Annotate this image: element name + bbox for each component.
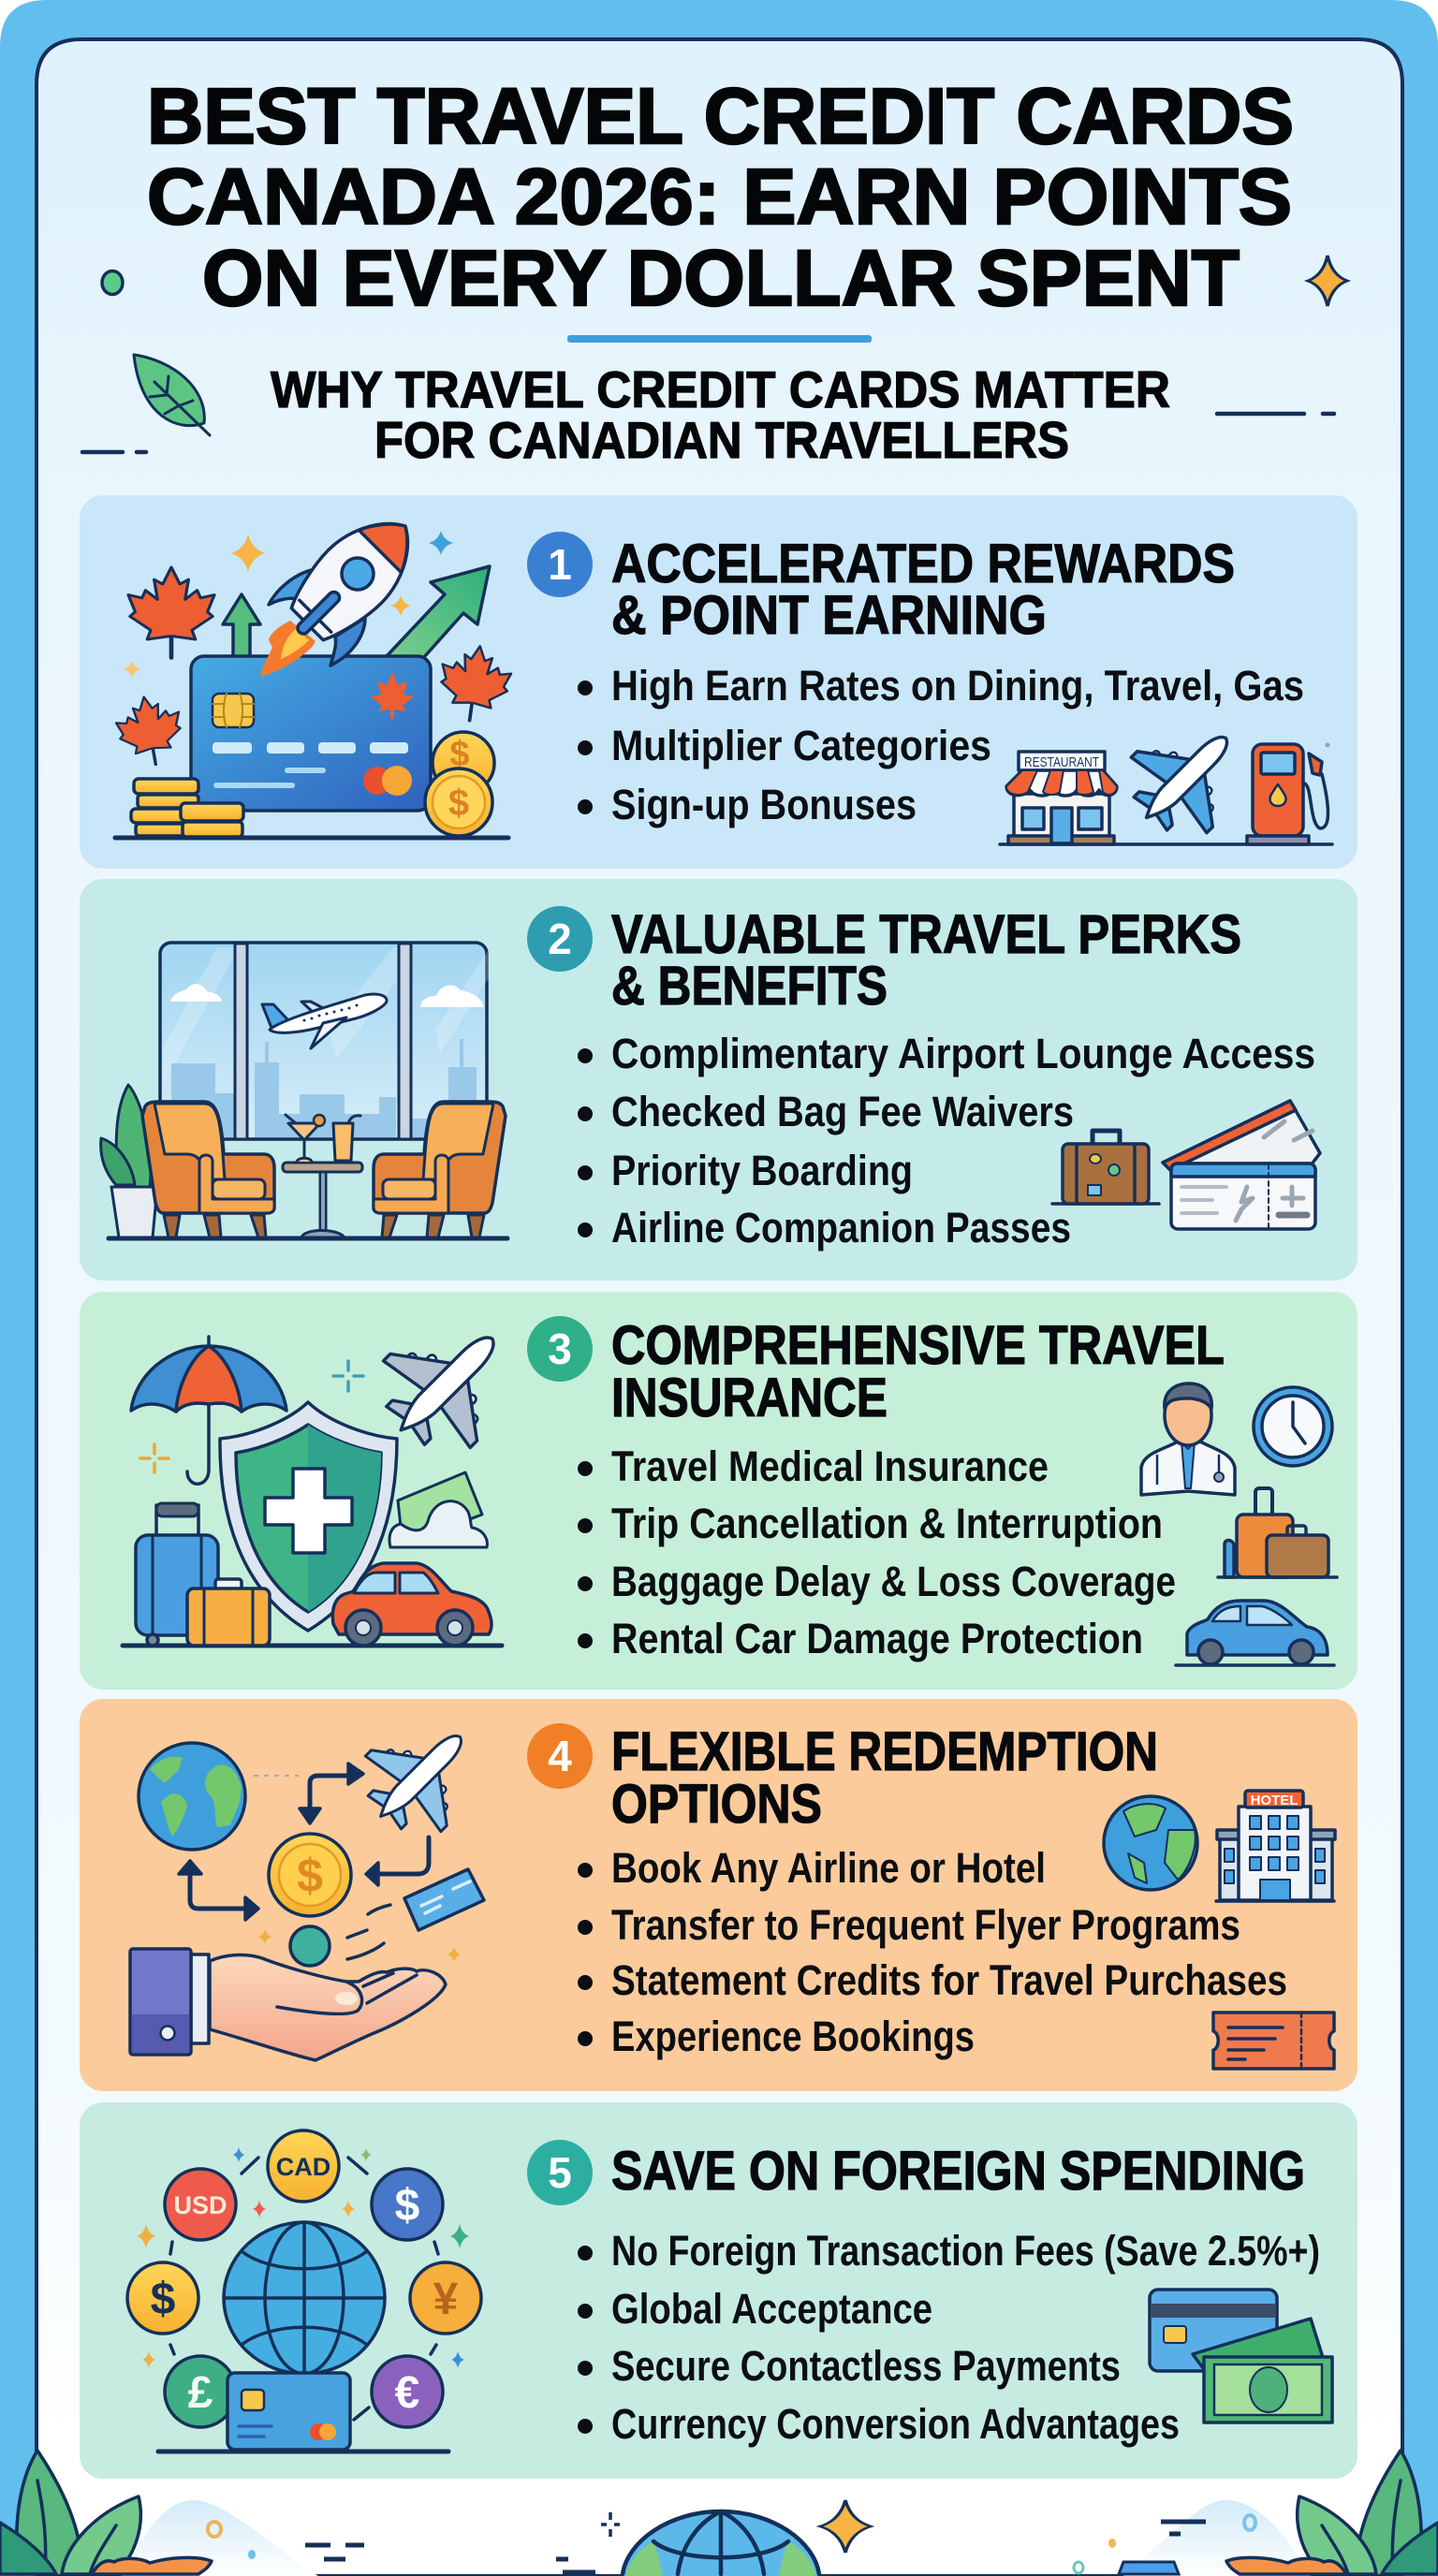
number badge 5	[527, 2140, 593, 2205]
number badge 2	[527, 906, 593, 972]
bullet list 4: Book Any Airline or Hotel	[611, 1844, 1046, 1892]
icons: globe, hotel, ticket	[1104, 1791, 1335, 2069]
bullet list 4: Experience Bookings	[611, 2012, 975, 2060]
heading 2: VALUABLE TRAVEL PERKS	[611, 904, 1241, 965]
subtitle: FOR CANADIAN TRAVELLERS	[374, 411, 1069, 469]
illustration: redemption cycle with globe, coin, hand: $	[297, 1850, 323, 1902]
illustration: card with rocket, arrows, maple leaves and coins: $	[448, 783, 469, 824]
bullet list 4: Transfer to Frequent Flyer Programs	[611, 1901, 1240, 1949]
title: CANADA 2026: EARN POINTS	[147, 153, 1292, 241]
bullet list 3: Trip Cancellation & Interruption	[611, 1500, 1163, 1547]
subtitle: WHY TRAVEL CREDIT CARDS MATTER	[271, 360, 1170, 418]
bullet list 2	[578, 1030, 1315, 1251]
title	[147, 72, 1294, 322]
heading 3: INSURANCE	[611, 1368, 888, 1428]
heading 3: COMPREHENSIVE TRAVEL	[611, 1315, 1225, 1376]
footer dots	[208, 2515, 1255, 2574]
title: ON EVERY DOLLAR SPENT	[202, 234, 1240, 322]
bullet list 1: High Earn Rates on Dining, Travel, Gas	[611, 662, 1304, 710]
bullet list 4	[578, 1844, 1287, 2060]
bullet list 3	[578, 1442, 1176, 1662]
number badge 1: 1	[548, 540, 572, 589]
number badge 1	[527, 532, 593, 597]
heading 2: & BENEFITS	[611, 956, 888, 1017]
icons: restaurant, plane, fuel pump: RESTAURANT	[1024, 754, 1099, 770]
leaves right	[1226, 2451, 1438, 2574]
decoration: dashes right	[1217, 412, 1334, 416]
panel 5: foreign spending	[80, 2102, 1357, 2479]
illustration: currency coins around globe and card	[127, 2130, 481, 2452]
heading 1: & POINT EARNING	[611, 585, 1047, 646]
title: BEST TRAVEL CREDIT CARDS	[147, 72, 1294, 160]
illustration: airport lounge	[101, 943, 507, 1238]
heading 4: OPTIONS	[611, 1774, 822, 1835]
icon: leaf	[134, 355, 210, 435]
illustration: currency coins around globe and card: CAD	[276, 2153, 330, 2181]
title divider	[567, 335, 872, 343]
heading 4: FLEXIBLE REDEMPTION	[611, 1721, 1158, 1782]
icons: doctor, clock, luggage, blue car	[1141, 1383, 1337, 1665]
number badge 4	[527, 1723, 593, 1789]
illustration: currency coins around globe and card: USD	[173, 2191, 227, 2219]
bullet list 2: Checked Bag Fee Waivers	[611, 1088, 1074, 1135]
footer gold star	[820, 2500, 871, 2553]
illustration: currency coins around globe and card: ¥	[433, 2275, 459, 2324]
heading 4	[611, 1721, 1158, 1835]
illustration: shield, umbrella, luggage and car	[123, 1295, 536, 1646]
bullet list 3: Rental Car Damage Protection	[611, 1615, 1143, 1662]
decoration: dashes left	[82, 450, 146, 454]
bullet list 2: Priority Boarding	[611, 1147, 913, 1194]
heading 1: ACCELERATED REWARDS	[611, 534, 1235, 594]
illustration: card with rocket, arrows, maple leaves and coins	[112, 500, 514, 838]
number badge 5: 5	[548, 2148, 572, 2197]
illustration: currency coins around globe and card: $	[395, 2181, 420, 2231]
number badge 3	[527, 1316, 593, 1382]
bullet list 3: Travel Medical Insurance	[611, 1442, 1049, 1490]
illustration: card with rocket, arrows, maple leaves and coins: $	[449, 735, 470, 774]
illustration: currency coins around globe and card: €	[395, 2368, 419, 2418]
panel 3: travel insurance	[80, 1292, 1357, 1690]
number badge 2: 2	[548, 915, 572, 963]
subtitle	[271, 360, 1170, 469]
bullet list 4: Statement Credits for Travel Purchases	[611, 1956, 1287, 2004]
illustration: redemption cycle with globe, coin, hand	[130, 1699, 498, 2060]
bullet list 3: Baggage Delay & Loss Coverage	[611, 1558, 1176, 1605]
bullet list 1	[578, 662, 1304, 828]
heading 2	[611, 904, 1241, 1017]
pale blue hills	[122, 2500, 1311, 2576]
icons: globe, hotel, ticket: HOTEL	[1251, 1793, 1298, 1808]
bullet list 5: Global Acceptance	[611, 2285, 932, 2333]
bullet list 1: Multiplier Categories	[611, 722, 991, 769]
bullet list 5: No Foreign Transaction Fees (Save 2.5%+)	[611, 2227, 1320, 2275]
panel 4: flexible redemption	[80, 1699, 1357, 2091]
heading 3	[611, 1315, 1225, 1428]
bullet list 1: Sign-up Bonuses	[611, 781, 917, 828]
illustration: currency coins around globe and card: $	[151, 2275, 176, 2324]
heading 1	[611, 534, 1235, 646]
bullet list 2: Airline Companion Passes	[611, 1204, 1071, 1251]
number badge 3: 3	[548, 1325, 572, 1373]
footer globe	[623, 2511, 819, 2576]
footer scene	[0, 2451, 1438, 2576]
illustration: currency coins around globe and card: £	[188, 2368, 213, 2418]
bullet list 5: Secure Contactless Payments	[611, 2342, 1121, 2390]
bullet list 2: Complimentary Airport Lounge Access	[611, 1030, 1315, 1077]
panel 2: travel perks	[80, 879, 1357, 1281]
bullet list 5: Currency Conversion Advantages	[611, 2400, 1180, 2448]
leaves left	[0, 2451, 212, 2574]
footer decorations	[305, 2512, 1206, 2572]
icons: restaurant, plane, fuel pump	[1000, 700, 1332, 856]
icons: suitcase and boarding passes	[1052, 1101, 1320, 1229]
decoration: green dot	[102, 271, 123, 294]
number badge 4: 4	[548, 1732, 572, 1780]
panel 1: accelerated rewards	[80, 495, 1357, 869]
decoration: gold star	[1308, 256, 1347, 306]
heading 5: SAVE ON FOREIGN SPENDING	[611, 2141, 1305, 2202]
bullet list 5	[578, 2227, 1320, 2448]
icons: bank card and banknotes	[1150, 2290, 1332, 2422]
